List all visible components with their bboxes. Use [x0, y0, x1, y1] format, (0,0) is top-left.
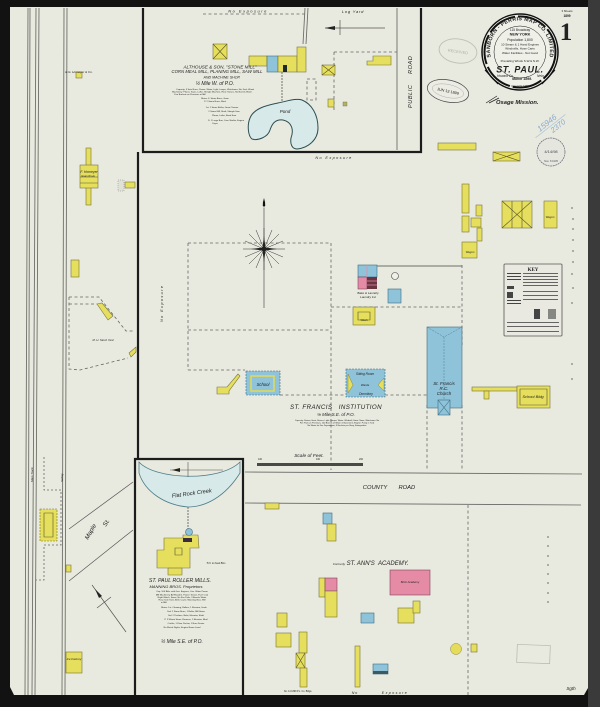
buildings: academy outbuildings [265, 503, 477, 687]
stamp: round [537, 138, 565, 166]
title seal: Sanborn-Perris Map Co.: Windmills, Hose Carts [505, 46, 535, 50]
arrow: inset north [325, 20, 385, 35]
pond: Pond [280, 109, 291, 114]
rail-side warehouse: Main Track [30, 467, 34, 482]
building: St. Francis R.C. church: St. Francis [433, 381, 455, 386]
arrow: inset north [170, 462, 223, 477]
label: bottom note: No. 14 1899 P.L. Co. Bldgs. [284, 691, 312, 693]
text block: mill title: ALTHOUSE & SON, "STONE MILL" [182, 64, 257, 70]
sheet number [560, 9, 573, 46]
text block: mill title: AND MACHINE SHOP. [203, 76, 240, 80]
text block: roller mills title: No Watch Nights, Engine Room Lined [164, 626, 201, 629]
key legend: KEY [528, 268, 539, 273]
creek [139, 462, 240, 507]
street: Maple St [69, 482, 133, 581]
title seal: Sanborn-Perris Map Co.: Copyright 1899 [511, 84, 529, 88]
text block: roller mills title: 2nd. 2 Stone Burrs, 1 Roller, Mill Stone [167, 610, 206, 613]
sheet number: 1899 [563, 14, 571, 18]
building: dormitory: Wards [361, 383, 370, 387]
stock yard: M. H. Stock Yard [93, 338, 114, 342]
panel: St. Paul Roller Mills inset [135, 459, 243, 695]
building: dormitory: Sitting Room [356, 372, 374, 376]
text block: institution title: Fire Pails on Premises, 100 Barrels of Water in Basement, Engine: Pump in Yard [300, 422, 375, 424]
tick marks: right margin [547, 208, 574, 602]
street: Maple St: St. [102, 518, 112, 528]
building: St. Francis R.C. church [427, 327, 462, 415]
sheet number: 3 Sheets [561, 9, 573, 13]
title seal: Sanborn-Perris Map Co.: Population 1,800 [507, 38, 533, 42]
scale of feet [257, 453, 364, 466]
panel: left column buildings: Grain W Ho [81, 174, 95, 178]
text block: roller mills title [149, 578, 211, 645]
subtitle: Osage Mission: Osage Mission. [496, 100, 539, 106]
railroad tracks [25, 8, 67, 695]
bottom-left building: Ice Factory [67, 657, 82, 661]
title seal: Sanborn-Perris Map Co.: Nebr. [537, 74, 545, 78]
text block: mill title: Dryer [212, 122, 218, 125]
panel: St. Ann's Academy block [265, 503, 576, 695]
label: top-left grain building [65, 70, 93, 78]
text block: mill title: D. 1 Large Burr, Corn Sheller, Engine [208, 119, 245, 122]
title seal: Sanborn-Perris Map Co.: March 1899. [512, 77, 532, 81]
stamp: received date: JUN 13 1899 [437, 87, 459, 96]
stock yard [69, 297, 136, 370]
text block: roller mills title: ½ Mile S.E. of P.O. [161, 638, 203, 645]
pond [248, 99, 318, 149]
building: school [217, 371, 280, 395]
divider frame: main panel left rule [137, 152, 139, 460]
label: log yard: Log Yard [342, 9, 364, 14]
text block: institution title: Capacity: Sisters, Heat: Stoves, Light: Lamps, Water: Windmill, Hose: None, Watchman: No [295, 419, 380, 422]
text block: mill title: CORN MEAL MILL, PLANING MILL, SAW MILL [171, 69, 263, 74]
text block: mill title: ½ Mile W. of P.O. [196, 80, 234, 87]
bottom-left building [66, 652, 82, 673]
text block: roller mills title: MANNING BROS. Proprietors [149, 584, 203, 589]
scale of feet: Scale of Feet. [294, 453, 324, 459]
text block: mill title: 1st. 1 Stone Roller, Grain Cleaner [206, 106, 239, 109]
heading: no exposure top: No Exposure [228, 8, 268, 14]
stamp: received date [425, 76, 471, 106]
label: no bottom: No [352, 691, 358, 695]
text block: roller mills title: Night Watch, Stove, No Fire Pails, 3 Barrels Water [158, 596, 207, 599]
text block: roller mills title: P. 2 Wheat Stone Cleaners, 1 Elevator, Meal [164, 618, 208, 621]
rail-side warehouse: Siding [60, 473, 64, 482]
key legend [504, 264, 562, 336]
rail-side warehouse [30, 457, 71, 580]
title seal: Sanborn-Perris Map Co.: 10 Steam & 1 Hand Engines [501, 42, 539, 46]
subtitle: Osage Mission [486, 96, 539, 106]
text block: mill title [171, 64, 263, 125]
title seal: Sanborn-Perris Map Co. [481, 13, 559, 91]
label: top-left grain building: E.G. Homeyer & Co. [65, 70, 93, 74]
building: school: School [257, 382, 270, 387]
text block: roller mills title: 3rd. 2 Purifiers, Bolts, Elevator, Shaft [168, 614, 204, 617]
creek: Flat Rock Creek [172, 488, 213, 500]
panel: right side buildings: Wagon [546, 215, 555, 219]
text block: mill title: Capacity: 5 Sets Burrs, Power: Water, Light: Lamps, Watchman: No, Fuel: Wood [176, 88, 255, 91]
text block: institution title: ⅛ Mile S.E. of P.O. [317, 412, 355, 417]
stamp: faint oval: RECEIVED [447, 48, 469, 55]
title seal: Sanborn-Perris Map Co.: 115 Broadway [510, 28, 530, 32]
panel: right side buildings [438, 143, 557, 408]
panel: left column buildings: F. Homeyer [80, 170, 99, 174]
building: laundry [357, 265, 401, 303]
text block: institution title: ST. FRANCIS INSTITUTION [290, 404, 382, 411]
text block: roller mills title: ST. PAUL ROLLER MILLS. [149, 578, 211, 584]
text block: mill title: Machinery: Planer, Saws, Lathe, Shingle Machine, Heat: Stoves, No Barrels Water [172, 90, 252, 94]
title seal: Sanborn-Perris Map Co.: Water Facilities - Not Good [502, 51, 538, 55]
building: St. Francis R.C. church: R.C. [440, 386, 448, 391]
road: County Road: COUNTY ROAD [363, 485, 415, 491]
panel: St. Francis Institution grounds [188, 243, 462, 470]
text block: roller mills title: in Mill. [161, 602, 167, 604]
mill buildings [213, 44, 391, 107]
building: yellow wash house [353, 307, 375, 325]
title seal: Sanborn-Perris Map Co.: NEW YORK [510, 32, 531, 36]
text block: institution title: No Water for Fire Department, 3 Buckets per Story, Extinguisher [307, 424, 367, 427]
panel: left column buildings [30, 70, 136, 673]
note: blue handwriting [530, 107, 571, 145]
building: dormitory: Dormitory [359, 392, 373, 396]
stamp: round: 4/14/98 [544, 149, 558, 154]
label: no exposure mid: No Exposure [315, 156, 353, 160]
building: laundry: Laundry 1st [360, 295, 376, 299]
panel: Althouse mill inset [143, 8, 421, 152]
heading: academy: Formerly ST. ANN'S ACADEMY. [333, 561, 409, 567]
building: St. Francis R.C. church: Church [437, 391, 452, 396]
building: pink academy hall: Brick Academy [401, 580, 420, 584]
title seal: Sanborn-Perris Map Co.: ST. PAUL. [496, 64, 544, 74]
label: signature: Sgth [566, 686, 576, 691]
label: public road: PUBLIC ROAD [408, 56, 414, 108]
text block: roller mills title: Cockle, 1 Flour Packer, 1 Bran Duster [168, 622, 205, 625]
panel: right side buildings: Wagon [466, 250, 475, 254]
title seal: Sanborn-Perris Map Co.: Prevailing Winds S.W.& N.W. [501, 59, 540, 63]
stamp: round: Nov. 8 1905 [544, 159, 558, 163]
sheet number: 1 [560, 19, 572, 46]
street: Maple St: Maple [84, 522, 98, 541]
roller mill buildings [157, 507, 226, 575]
text block: roller mills title: Cap. 100 Bbls. with Gas. Engines, Con. Water Power [156, 590, 208, 593]
scale of feet: 100 [258, 458, 263, 461]
label: no exposure bottom: Exposure [382, 691, 408, 695]
text block: roller mills title: Mill Machinery: All Wooden, Power: Steam, Fuel: Coal [156, 594, 209, 596]
scale of feet: 100 [316, 458, 321, 461]
building: yellow wash house: Wash [360, 318, 368, 322]
text block: roller mills title: Hose from Tank, Belts Cover, Manning Bros. Mill [159, 598, 206, 602]
building: pink academy hall [390, 570, 430, 595]
text block: mill title: Planer, Lathe, Band Saw [212, 114, 236, 117]
text block: mill title: Mains: F. Stone Burrs, Grain [201, 97, 230, 100]
compass rose [243, 198, 285, 308]
title seal: Sanborn-Perris Map Co.: Howard Co. [497, 74, 514, 78]
road: County Road [245, 472, 582, 505]
building: dormitory [346, 369, 385, 397]
text block: mill title: Fire Buckets on Premises at Mill [174, 93, 206, 96]
note: blue handwriting: 2370 [548, 117, 568, 135]
roller mill buildings: 5 Ft. to Feed Bins [207, 562, 226, 565]
building: laundry: Bake & Laundry [357, 291, 379, 295]
title seal: Sanborn-Perris Map Co.: SANBORN - PERRIS MAP CO. LIMITED [486, 16, 554, 58]
text block: mill title: 2 Stone Mill, Shaft, Shingle Saw [208, 110, 240, 113]
scale of feet: 200 [359, 458, 364, 461]
stamp: faint oval [438, 36, 478, 66]
faint stamp box [517, 644, 550, 664]
building: school-yard wing [472, 386, 550, 408]
text block: roller mills title: Mains: 1st. Cleaning, Rollers, 1 Elevator, Scale [161, 606, 208, 609]
arrow: north point lower left [92, 585, 126, 632]
note: blue handwriting: 15946 [535, 112, 559, 134]
text block: institution title [290, 404, 382, 427]
text block: mill title: P. 2 Stone Burrs, Meal [204, 100, 226, 103]
building: school-yard wing: School Bldg [522, 394, 544, 399]
label: no exposure side: No Exposure [160, 285, 164, 322]
